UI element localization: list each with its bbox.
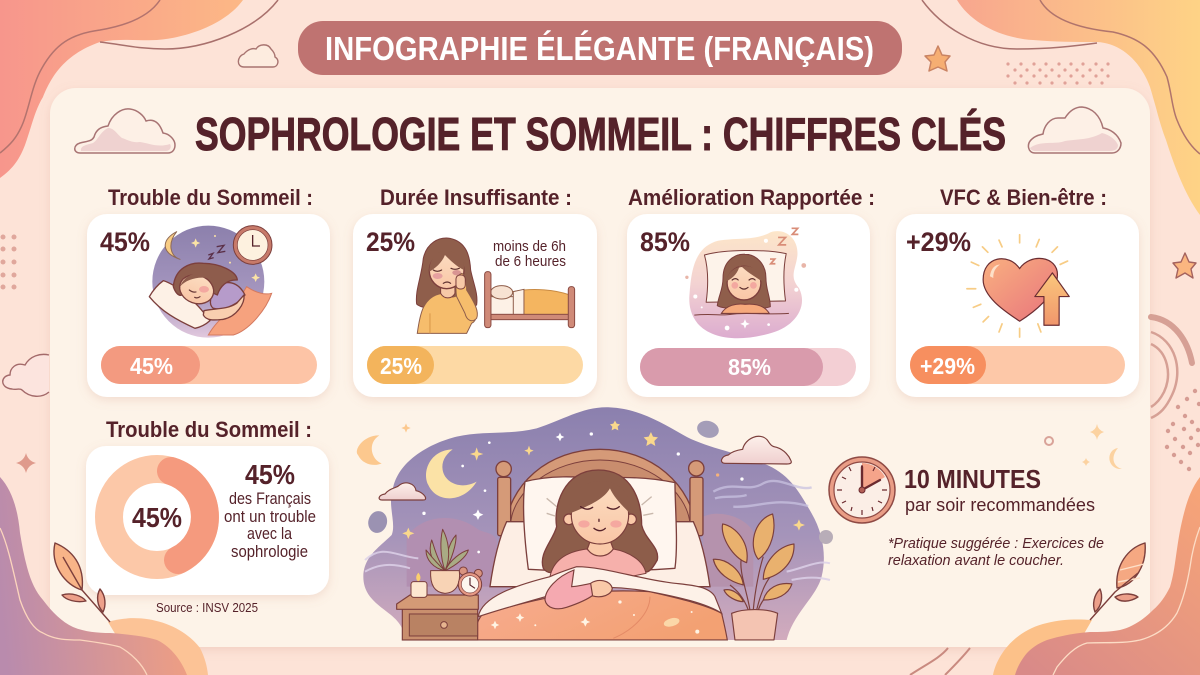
torso	[550, 549, 646, 587]
night sky blob	[363, 407, 824, 640]
decoration: top-left corner wave	[0, 0, 278, 178]
source: Source : INSV 2025	[156, 600, 258, 615]
decoration: slanted dots right	[1165, 389, 1200, 471]
headboard	[496, 449, 704, 536]
decoration: small cloud top	[238, 45, 278, 67]
stars	[401, 421, 805, 539]
stat: 25%: 25%	[366, 227, 415, 257]
text: 10 minutes: 10 MINUTES	[904, 464, 1041, 494]
title pill	[298, 21, 902, 75]
panel: card 1 trouble du sommeil	[87, 214, 330, 397]
decoration: pink sparkle left	[16, 453, 36, 473]
small plant	[426, 529, 468, 593]
waves	[713, 481, 812, 507]
caption: moins de 6h	[493, 238, 566, 270]
label: card 1: Trouble du Sommeil :	[108, 185, 313, 210]
label: card 3: Amélioration Rapportée :	[628, 185, 875, 210]
progress bar +29%: +29%	[920, 353, 975, 379]
right plant	[713, 514, 794, 640]
progress bar 85%: 85%	[728, 354, 771, 380]
decoration: top-right corner wave	[922, 0, 1200, 215]
text block: des Français: 45%	[245, 459, 295, 490]
ears and face	[564, 514, 574, 525]
mattress	[490, 522, 710, 587]
text: suggested practice note	[888, 535, 1104, 569]
progress bar 25%	[367, 346, 583, 384]
illustration: sleeping girl in bed	[357, 407, 830, 640]
ovals	[695, 418, 721, 440]
pillow	[524, 477, 676, 571]
nightstand	[397, 595, 478, 640]
panel: card 4 VFC et bien-être	[896, 214, 1139, 397]
decoration: left cloud	[3, 354, 49, 396]
arm and hand	[545, 570, 593, 609]
panel: donut stat	[86, 446, 329, 595]
panel: card 3 amélioration rapportée	[627, 214, 870, 397]
big moon	[426, 449, 477, 498]
stat: +29%: +29%	[906, 227, 971, 257]
hair	[542, 470, 658, 573]
text: suggested practice note: relaxation avant le coucher.	[888, 552, 1064, 569]
icon: right leaf branch	[1090, 543, 1145, 620]
decoration: dot grid top right	[1006, 62, 1110, 85]
donut chart 45%	[109, 469, 205, 565]
caption: moins de 6h: de 6 heures	[495, 253, 566, 270]
label: donut panel: Trouble du Sommeil :	[106, 417, 312, 442]
blanket	[474, 591, 727, 640]
decoration: star right	[1173, 253, 1196, 278]
text: suggested practice note: *Pratique suggérée : Exercices de	[888, 535, 1104, 552]
icon: heart with arrow and rays	[967, 235, 1069, 337]
label: card 2: Durée Insuffisante :	[380, 185, 572, 210]
icon: clock 10 minutes	[829, 457, 895, 523]
progress bar 45%	[101, 346, 317, 384]
caption: moins de 6h: moins de 6h	[493, 238, 566, 255]
icon: smiling sleeper on pillow	[685, 228, 806, 338]
main panel	[50, 88, 1150, 647]
decoration: bottom-right wave	[1015, 477, 1200, 675]
text block: des Français: ont un trouble	[224, 508, 316, 526]
icon: left cloud beside heading	[75, 109, 175, 153]
decoration: dots left	[0, 234, 16, 290]
small moon	[357, 435, 382, 465]
decoration: concentric arcs right	[1151, 317, 1192, 418]
decorative oval right of scene	[819, 530, 833, 544]
decoration: bottom-left wave	[0, 477, 187, 675]
candle	[411, 573, 427, 597]
label: card 4: VFC & Bien-être :	[940, 185, 1107, 210]
text block: des Français: sophrologie	[231, 543, 308, 561]
progress bar 45%: 45%	[130, 353, 173, 379]
title pill text: INFOGRAPHIE ÉLÉGANTE (FRANÇAIS)	[325, 30, 874, 67]
decoration: bottom-left peach shape	[108, 618, 208, 675]
stat: 45%: 45%	[100, 227, 150, 257]
decoration: bottom strokes	[910, 648, 970, 675]
clouds	[721, 436, 791, 464]
panel: card 2 durée insuffisante	[353, 214, 597, 397]
icon: sleeping woman	[149, 226, 272, 338]
donut chart 45%: 45%	[132, 502, 182, 533]
text block: des Français: avec la	[247, 525, 293, 543]
stat: 85%: 85%	[640, 227, 690, 257]
progress bar 85%	[640, 348, 856, 386]
progress bar +29%	[910, 346, 1125, 384]
decorations around the clock: moon and sparkles	[1045, 424, 1122, 469]
icon: orange star	[925, 46, 950, 71]
alarm clock	[458, 567, 482, 596]
icon: tired woman and bed	[416, 238, 575, 333]
text block: des Français: des Français	[229, 490, 311, 508]
decoration: bottom-right peach shape	[993, 619, 1092, 675]
progress bar 25%: 25%	[380, 353, 422, 379]
icon: right cloud beside heading	[1028, 107, 1121, 153]
text: par soir recommandées: par soir recommandées	[905, 495, 1095, 515]
text block: des Français	[224, 459, 316, 561]
icon: left leaf branch	[54, 543, 110, 622]
